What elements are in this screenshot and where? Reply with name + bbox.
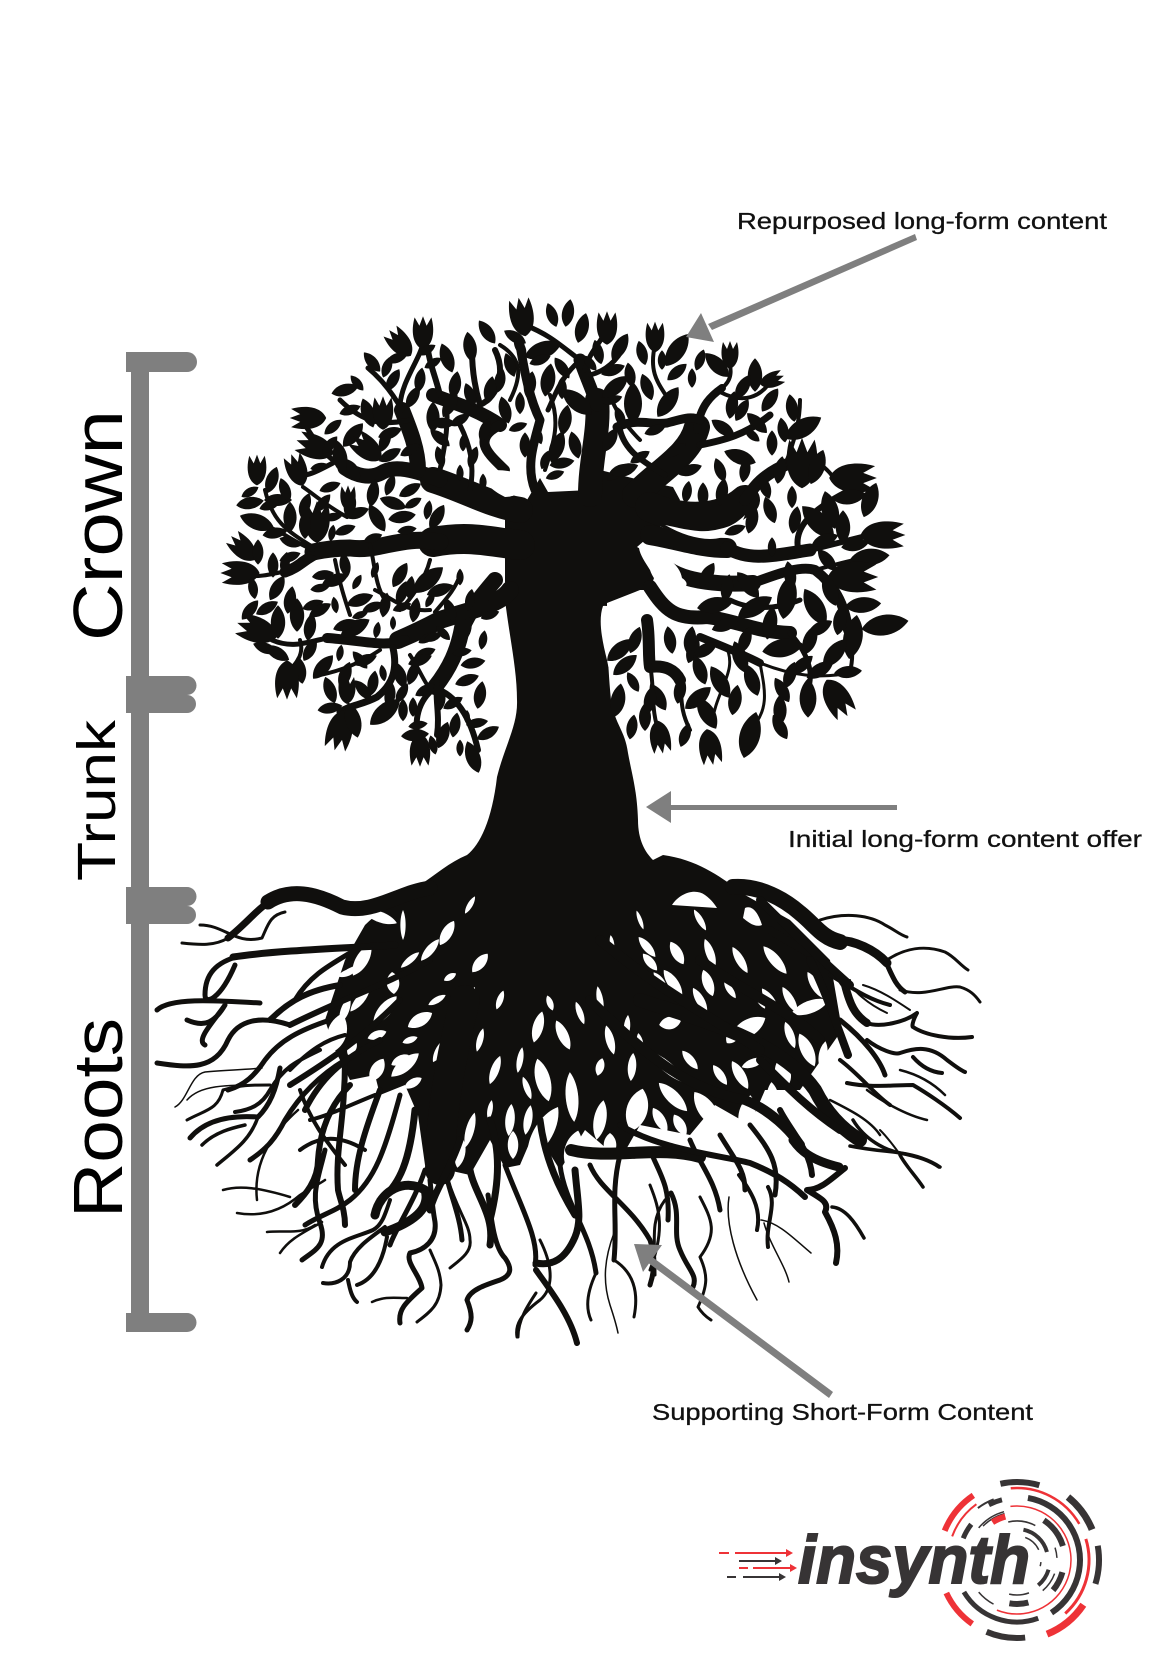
tree: trunk and root core — [325, 470, 842, 1175]
arrow: repurposed long-form content — [686, 234, 917, 342]
label: Roots: Roots — [59, 1018, 137, 1218]
logo speed lines — [719, 1549, 797, 1581]
logo wordmark: insynth — [798, 1522, 1030, 1598]
logo: insynth — [719, 1446, 1131, 1662]
label: initial long-form content offer: Initial long-form content offer — [788, 826, 1142, 852]
tree: crown limbs — [240, 325, 870, 750]
label: supporting short-form content: Supporting Short-Form Content — [652, 1399, 1034, 1425]
tree illustration — [157, 296, 980, 1343]
arrow: supporting short-form content — [634, 1244, 833, 1398]
tree: leaves — [220, 296, 910, 775]
tree: white gaps in the crown — [480, 470, 745, 680]
logo rings — [903, 1446, 1131, 1662]
label: Trunk: Trunk — [67, 719, 127, 881]
tree: roots — [157, 887, 980, 1343]
label: repurposed long-form content: Repurposed long-form content — [737, 208, 1108, 234]
arrow: initial long-form content — [646, 791, 897, 823]
label: Crown: Crown — [59, 410, 137, 641]
bracket scale: crown, trunk, roots — [126, 352, 197, 1332]
tree: white gaps between roots — [323, 892, 831, 1171]
